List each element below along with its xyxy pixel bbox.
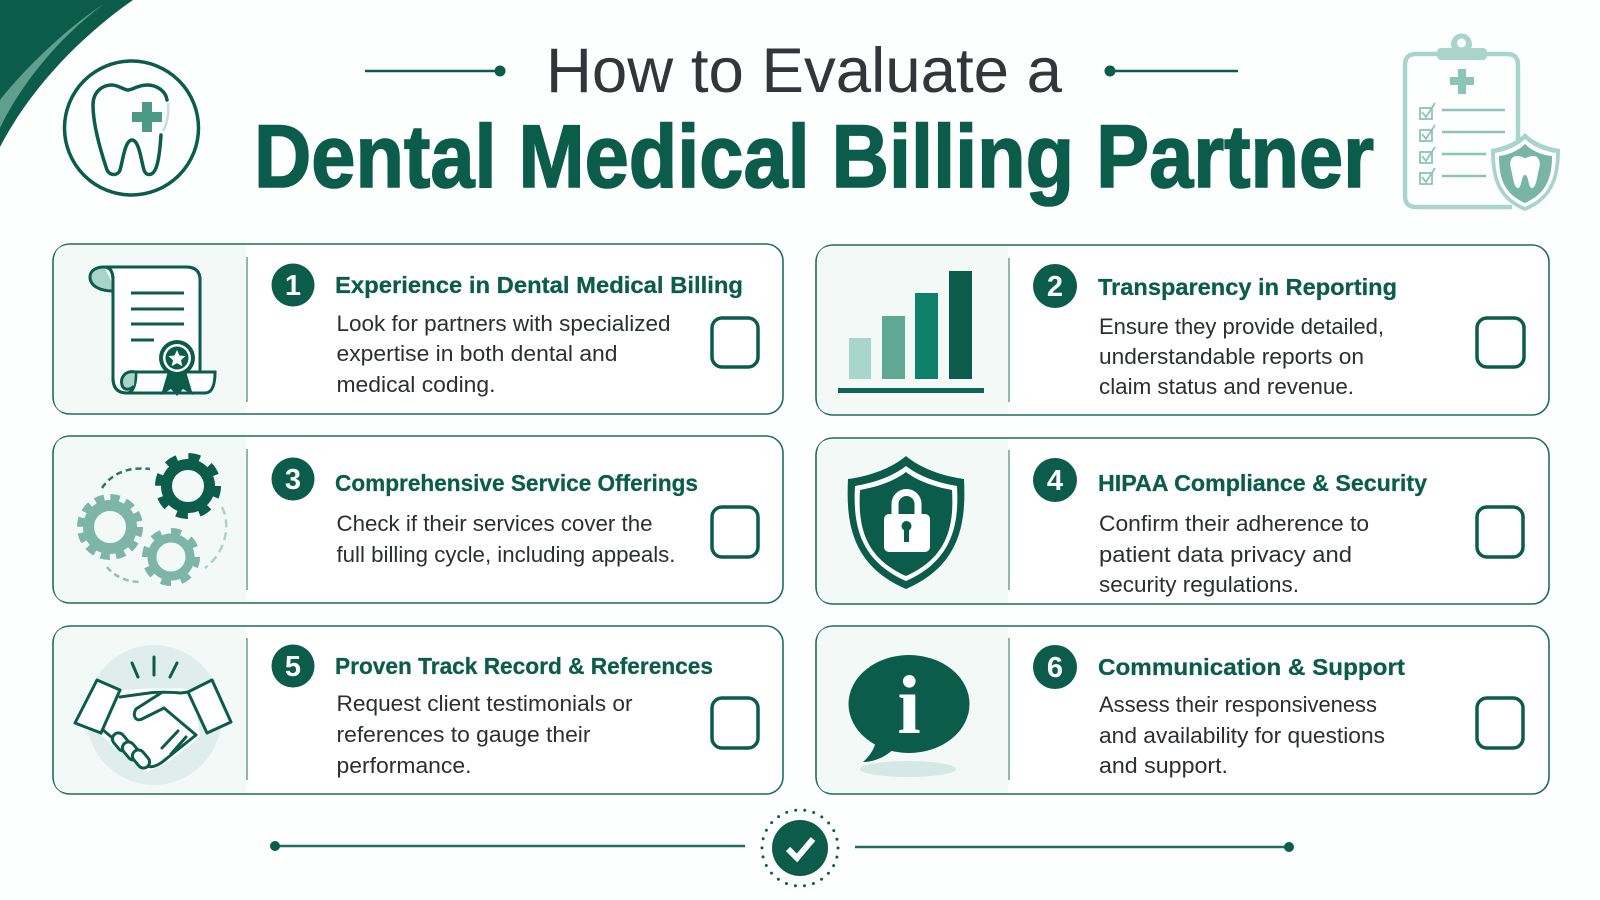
icon: info speech bubble: i: [897, 659, 921, 752]
number badge 4: 4: [1047, 465, 1063, 497]
checkbox 2: [1477, 318, 1524, 367]
title line 1: How to Evaluate a: [546, 36, 1063, 106]
heading 5: Proven Track Record & References: [335, 653, 713, 679]
text block 6: [1099, 692, 1385, 778]
text block 3: full billing cycle, including appeals.: [336, 542, 676, 567]
number badge 6: [1033, 645, 1077, 689]
footer: check badge: [762, 810, 838, 886]
heading 2: Transparency in Reporting: [1098, 274, 1397, 300]
number badge 5: [272, 644, 314, 688]
title line 2: Dental Medical Billing Partner: [254, 106, 1374, 206]
icon: diploma scroll: [90, 267, 215, 396]
text block 5: Request client testimonials or: [336, 691, 632, 716]
checkbox 1: [712, 318, 758, 367]
icon: gears: [81, 457, 226, 582]
text block 3: Check if their services cover the: [336, 511, 652, 536]
text block 2: understandable reports on: [1099, 344, 1364, 369]
number badge 3: 3: [285, 464, 301, 496]
heading 6: Communication & Support: [1098, 654, 1405, 680]
text block 2: Ensure they provide detailed,: [1099, 314, 1384, 339]
icon: clipboard with shield: [1405, 34, 1560, 211]
text block 4: patient data privacy and: [1099, 542, 1352, 567]
number badge 1: 1: [285, 270, 301, 302]
heading decoration: right line: [1104, 66, 1238, 76]
text block 1: expertise in both dental and: [336, 341, 618, 366]
icon: info speech bubble: [848, 655, 970, 777]
icon: handshake: [75, 645, 231, 785]
panel: 2 transparency: [816, 245, 1549, 415]
heading 1: Experience in Dental Medical Billing: [335, 272, 743, 298]
text block 4: [1099, 511, 1369, 597]
checkbox 6: [1477, 698, 1523, 748]
panel: 6 communication: [816, 626, 1549, 794]
panel: 3 services: [53, 436, 783, 603]
heading 4: HIPAA Compliance & Security: [1098, 470, 1427, 496]
text block 4: Confirm their adherence to: [1099, 511, 1369, 536]
text block 3: [336, 511, 676, 567]
corner swoosh: [0, 0, 133, 147]
text block 4: security regulations.: [1099, 572, 1299, 597]
checkbox 5: [712, 698, 758, 748]
text block 1: [336, 311, 670, 397]
text block 6: and availability for questions: [1099, 723, 1385, 748]
panel: 5 references: [53, 626, 783, 794]
text block 2: [1099, 314, 1384, 399]
heading decoration: left line: [365, 66, 506, 76]
number badge 5: 5: [285, 651, 301, 683]
number badge 6: 6: [1047, 652, 1063, 684]
text block 1: Look for partners with specialized: [336, 311, 670, 336]
number badge 3: [272, 458, 314, 500]
text block 6: Assess their responsiveness: [1099, 692, 1377, 717]
panel: 4 HIPAA: [816, 438, 1549, 604]
text block 5: [336, 691, 632, 778]
text block 5: performance.: [336, 753, 472, 778]
text block 6: and support.: [1099, 753, 1228, 778]
heading 3: Comprehensive Service Offerings: [335, 470, 698, 496]
text block 2: claim status and revenue.: [1099, 374, 1354, 399]
chart: rising bars: [838, 271, 984, 393]
footer: left rule: [270, 841, 745, 851]
number badge 2: [1033, 264, 1077, 308]
number badge 1: [272, 264, 314, 306]
icon: shield and lock: [848, 456, 964, 589]
icon: tooth emblem: [64, 61, 198, 195]
checkbox 4: [1477, 507, 1523, 557]
panel: 1 experience: [53, 244, 783, 414]
number badge 4: [1033, 458, 1077, 502]
footer: right rule: [855, 842, 1294, 852]
text block 1: medical coding.: [336, 372, 496, 397]
text block 5: references to gauge their: [336, 722, 590, 747]
checkbox 3: [712, 507, 758, 557]
number badge 2: 2: [1047, 271, 1063, 303]
